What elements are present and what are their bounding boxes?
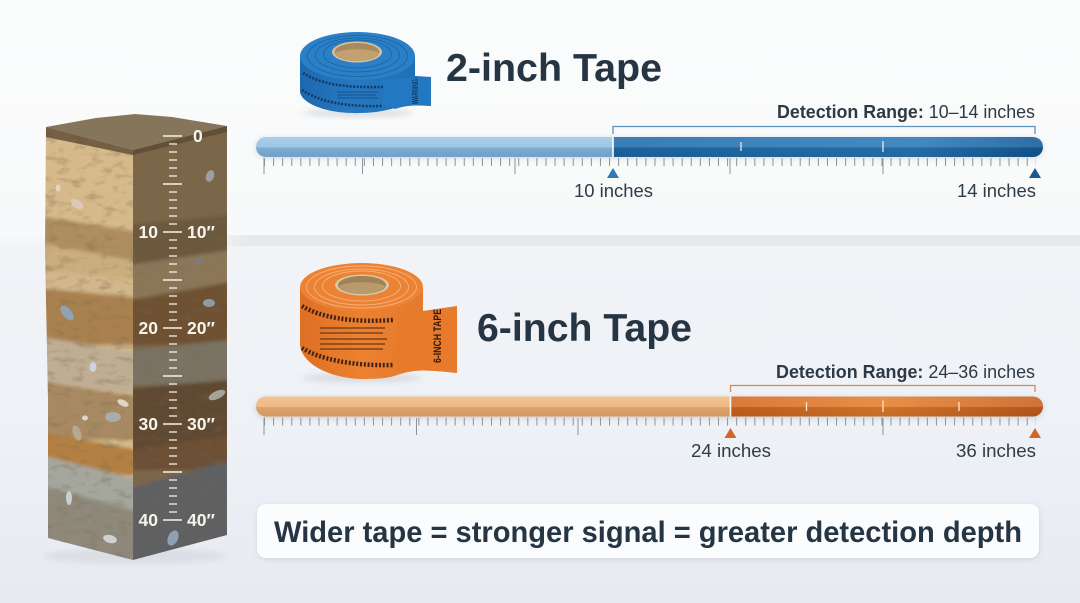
callout: Wider tape = stronger signal = greater detection depth	[274, 516, 1022, 549]
depth bar	[256, 137, 1043, 158]
heading: 6-inch tape: 6-inch Tape	[477, 307, 692, 350]
soil right face layers	[130, 120, 230, 570]
depth scale labels: 20″	[187, 318, 215, 338]
icon: blue tape roll	[300, 32, 431, 117]
soil left face layers	[45, 127, 133, 560]
panel: 6-inch tape	[256, 263, 1043, 461]
depth scale labels	[139, 126, 215, 530]
icon: blue tape roll: WARNING	[410, 79, 420, 104]
detection range label: Detection Range: 10–14 inches	[777, 102, 1035, 122]
depth markers: 14 inches	[957, 181, 1036, 201]
depth scale labels: 20	[139, 318, 158, 338]
section divider band	[205, 235, 1080, 246]
depth scale ticks	[163, 136, 182, 520]
ruler	[264, 158, 1036, 174]
depth scale labels: 0	[193, 126, 203, 146]
ruler	[264, 418, 1036, 435]
depth scale labels: 10″	[187, 222, 215, 242]
detection range label: Detection Range: 24–36 inches	[776, 362, 1035, 382]
icon: orange tape roll	[300, 263, 457, 382]
soil column	[40, 114, 230, 570]
soil top surface	[46, 114, 227, 150]
callout	[257, 504, 1039, 559]
heading: 2-inch tape: 2-inch Tape	[446, 47, 662, 90]
depth scale labels: 30″	[187, 414, 215, 434]
range bracket	[730, 386, 1035, 392]
depth markers: 10 inches	[574, 181, 653, 201]
depth markers	[574, 168, 1041, 201]
icon: orange tape roll: 6-INCH TAPE	[432, 309, 444, 363]
depth scale labels: 40	[139, 510, 158, 530]
panel: 2-inch tape	[256, 32, 1043, 201]
depth scale labels: 40″	[187, 510, 215, 530]
depth scale labels: 10	[139, 222, 158, 242]
range bracket	[613, 126, 1035, 134]
depth markers	[691, 428, 1041, 461]
depth markers: 36 inches	[956, 441, 1036, 461]
depth markers: 24 inches	[691, 441, 771, 461]
depth scale labels: 30	[139, 414, 158, 434]
pebbles	[56, 169, 227, 547]
depth bar	[256, 396, 1043, 418]
